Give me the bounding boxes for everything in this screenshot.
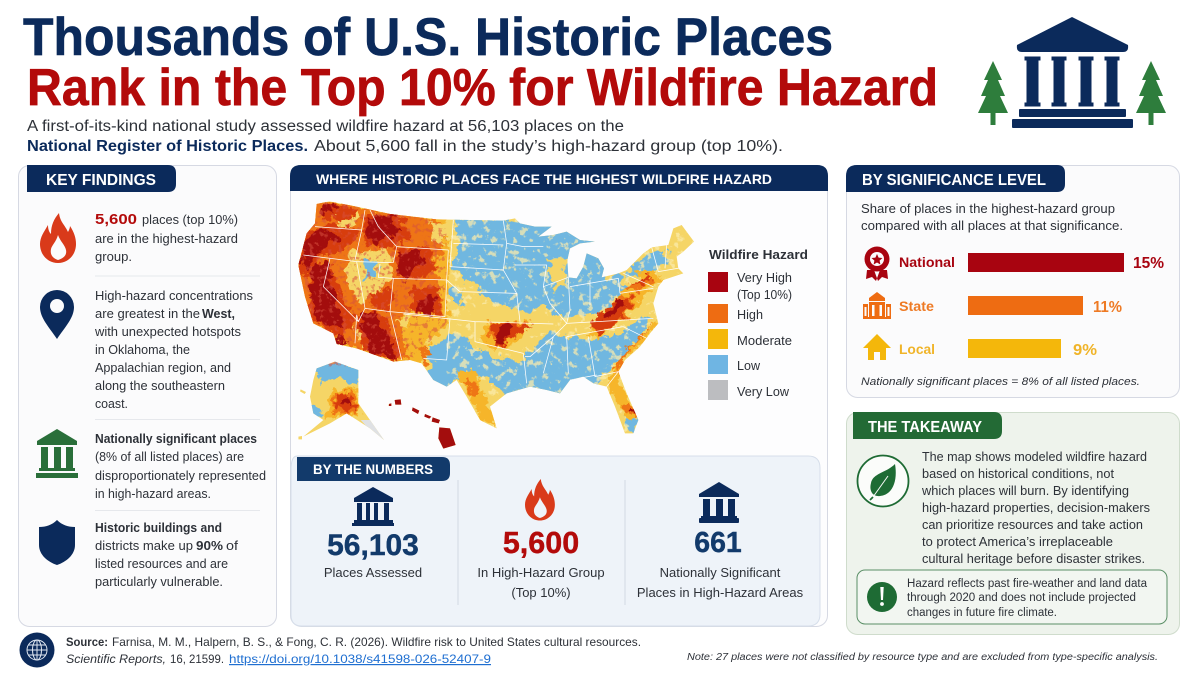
callout: hazard caveat bbox=[857, 570, 1167, 624]
text: significance description bbox=[861, 201, 1123, 233]
callout: hazard caveat: Hazard reflects past fire-weather and land data bbox=[907, 578, 1148, 590]
source citation: Scientific Reports, bbox=[66, 652, 166, 666]
legend: High bbox=[737, 308, 763, 322]
text: historic buildings: 90% bbox=[196, 538, 224, 553]
text: high-hazard concentrations: High-hazard concentrations bbox=[95, 288, 253, 303]
text: high-hazard concentrations: are greatest in the bbox=[95, 306, 200, 321]
legend: Moderate bbox=[737, 334, 792, 348]
panel: key findings bbox=[18, 165, 276, 626]
text: 5,600 places: places (top 10%) bbox=[142, 212, 238, 227]
text: takeaway: which places will burn. By identifying bbox=[921, 483, 1129, 498]
icon: flame bbox=[40, 213, 76, 263]
bar chart: significance bbox=[863, 246, 1164, 360]
text: high-hazard concentrations: in Oklahoma, the bbox=[95, 342, 190, 357]
legend bbox=[708, 247, 808, 400]
footnote: Note: 27 places were not classified by resource type and are excluded from type-specific analysis. bbox=[687, 652, 1158, 663]
legend: Wildfire Hazard bbox=[709, 247, 808, 262]
stat: nationally significant: 661 bbox=[694, 527, 742, 559]
heading: significance bbox=[846, 165, 1065, 192]
text: nationally significant: Nationally significant places bbox=[95, 431, 257, 446]
icon: medal bbox=[864, 246, 890, 281]
icon: green building bbox=[36, 429, 78, 478]
icon: globe bbox=[20, 632, 54, 668]
stat: nationally significant: Places in High-Hazard Areas bbox=[637, 585, 804, 600]
legend: Very Low bbox=[737, 385, 790, 399]
bar chart: significance: National bbox=[899, 255, 955, 270]
bar chart: significance: State bbox=[899, 299, 935, 314]
legend: Low bbox=[737, 359, 761, 373]
text: takeaway: based on historical conditions, not bbox=[922, 466, 1114, 481]
title: Rank in the Top 10% for Wildfire Hazard bbox=[27, 59, 938, 117]
text: significance description: Share of places in the highest-hazard group bbox=[861, 201, 1115, 216]
panel: wildfire hazard map bbox=[290, 165, 828, 626]
text: takeaway: to protect America’s irreplaceable bbox=[922, 534, 1113, 549]
text: 5,600 places: group. bbox=[95, 249, 132, 264]
source citation: https://doi.org/10.1038/s41598-026-52407-9 bbox=[229, 652, 491, 666]
note: nationally significant share: Nationally significant places = 8% of all listed places. bbox=[861, 376, 1140, 388]
text: high-hazard concentrations: West, bbox=[202, 306, 235, 321]
text: takeaway: cultural heritage before disaster strikes. bbox=[922, 551, 1145, 566]
stat: high-hazard group: 5,600 bbox=[503, 526, 579, 560]
text: 5,600 places: are in the highest-hazard bbox=[95, 231, 238, 246]
text: historic buildings: particularly vulnerable. bbox=[95, 574, 223, 589]
text: takeaway: The map shows modeled wildfire hazard bbox=[922, 449, 1147, 464]
bar chart: significance: 9% bbox=[1073, 342, 1097, 359]
icon: exclamation bbox=[867, 582, 897, 612]
text: takeaway: can prioritize resources and take action bbox=[922, 517, 1143, 532]
text: historic buildings bbox=[95, 520, 238, 589]
subtitle: About 5,600 fall in the study’s high-hazard group (top 10%). bbox=[314, 138, 783, 155]
source citation: Source: bbox=[66, 635, 108, 649]
source citation bbox=[66, 635, 641, 666]
text: 5,600 places bbox=[95, 211, 238, 264]
icon: house bbox=[863, 334, 891, 360]
heading: significance: BY SIGNIFICANCE LEVEL bbox=[862, 172, 1046, 189]
map: United States wildfire hazard bbox=[290, 190, 700, 450]
heading: takeaway bbox=[853, 412, 1002, 439]
icon: shield bbox=[39, 520, 75, 565]
panel: by significance level bbox=[846, 165, 1180, 398]
subtitle: National Register of Historic Places. bbox=[27, 138, 308, 155]
subtitle bbox=[27, 118, 783, 155]
heading: key findings bbox=[27, 165, 176, 192]
text: historic buildings: Historic buildings and bbox=[95, 520, 222, 535]
stat: places assessed: 56,103 bbox=[327, 529, 419, 562]
source citation: 16, 21599. bbox=[170, 652, 224, 666]
stat: high-hazard group: In High-Hazard Group bbox=[477, 565, 605, 580]
legend: Very High bbox=[737, 271, 792, 285]
stat: places assessed bbox=[324, 487, 422, 580]
text: significance description: compared with all places at that significance. bbox=[861, 218, 1123, 233]
stat: high-hazard group bbox=[477, 479, 605, 600]
text: high-hazard concentrations: with unexpected hotspots bbox=[94, 324, 241, 339]
legend: (Top 10%) bbox=[737, 288, 792, 302]
bar chart: significance: Local bbox=[899, 342, 935, 357]
callout: hazard caveat: changes in future fire climate. bbox=[907, 607, 1057, 619]
source citation: Farnisa, M. M., Halpern, B. S., & Fong, C. R. (2026). Wildfire risk to United States cultural resources. bbox=[112, 635, 641, 649]
stat: high-hazard group: (Top 10%) bbox=[511, 585, 571, 600]
heading: by the numbers: BY THE NUMBERS bbox=[313, 462, 433, 477]
callout: hazard caveat: through 2020 and does not include projected bbox=[907, 592, 1136, 604]
text: high-hazard concentrations: coast. bbox=[95, 396, 128, 411]
title: Thousands of U.S. Historic Places bbox=[23, 8, 833, 67]
text: high-hazard concentrations: along the southeastern bbox=[95, 378, 225, 393]
panel: by the numbers bbox=[291, 456, 820, 626]
heading: map bbox=[290, 165, 828, 191]
heading: takeaway: THE TAKEAWAY bbox=[868, 419, 983, 436]
stat: nationally significant: Nationally Significant bbox=[660, 565, 781, 580]
text: nationally significant: disproportionately represented bbox=[95, 468, 266, 483]
icon: leaf bbox=[858, 456, 908, 506]
text: nationally significant: (8% of all listed places) are bbox=[95, 449, 244, 464]
subtitle: A first-of-its-kind national study assessed wildfire hazard at 56,103 places on the bbox=[27, 118, 624, 135]
stat: places assessed: Places Assessed bbox=[324, 565, 422, 580]
text: historic buildings: of bbox=[226, 538, 238, 553]
heading: by the numbers bbox=[297, 457, 450, 481]
panel: the takeaway bbox=[846, 412, 1180, 634]
title bbox=[23, 8, 938, 117]
text: high-hazard concentrations bbox=[94, 288, 253, 411]
stat: nationally significant bbox=[637, 482, 804, 600]
bar chart: significance: 11% bbox=[1093, 299, 1122, 316]
heading: key findings: KEY FINDINGS bbox=[46, 172, 156, 189]
text: historic buildings: districts make up bbox=[95, 538, 193, 553]
text: nationally significant: in high-hazard areas. bbox=[95, 486, 211, 501]
heading: map: WHERE HISTORIC PLACES FACE THE HIGHEST WILDFIRE HAZARD bbox=[316, 171, 772, 187]
icon: state building bbox=[863, 292, 891, 319]
text: 5,600 places: 5,600 bbox=[95, 211, 137, 228]
text: takeaway: high-hazard properties, decision-makers bbox=[922, 500, 1150, 515]
text: nationally significant bbox=[95, 431, 266, 501]
bar chart: significance: 15% bbox=[1133, 255, 1164, 272]
text: historic buildings: listed resources and are bbox=[95, 556, 228, 571]
icon: historic building with trees bbox=[978, 17, 1166, 128]
icon: map pin bbox=[40, 290, 74, 339]
text: high-hazard concentrations: Appalachian region, and bbox=[95, 360, 231, 375]
text: takeaway bbox=[921, 449, 1150, 566]
